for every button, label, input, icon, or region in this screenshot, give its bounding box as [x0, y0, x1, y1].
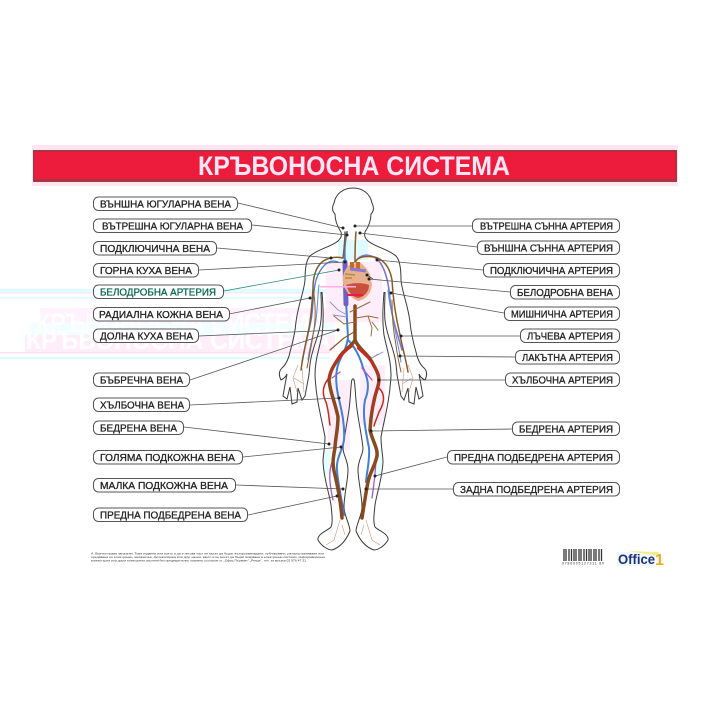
- right label: femoral artery: БЕДРЕНА АРТЕРИЯ: [519, 424, 613, 436]
- pale tint behind vessels: [323, 240, 385, 475]
- left label: subclavian vein: ПОДКЛЮЧИЧНА ВЕНА: [100, 243, 210, 255]
- decorative ghost stripes: [0, 289, 335, 359]
- title: КРЪВОНОСНА СИСТЕМА: [198, 151, 510, 181]
- title banner: [32, 145, 678, 186]
- icon: heart: [320, 262, 372, 301]
- left label: anterior tibial vein: ПРЕДНА ПОДБЕДРЕНА ВЕНА: [100, 510, 241, 522]
- left label: superior vena cava: ГОРНА КУХА ВЕНА: [100, 265, 192, 277]
- logo: Office1: 1: [655, 552, 664, 569]
- left label: iliac vein: ХЪЛБОЧНА ВЕНА: [100, 400, 184, 412]
- right label: ulnar artery: ЛАКЪТНА АРТЕРИЯ: [522, 352, 613, 364]
- left label: external jugular vein: ВЪНШНА ЮГУЛАРНА ВЕНА: [100, 198, 231, 210]
- right label: brachial artery: МИШНИЧНА АРТЕРИЯ: [511, 308, 613, 320]
- decorative ghost stripes: КРЪВОНОСНА СИСТЕМА: [26, 325, 331, 355]
- legal note: предавани по електронен, механичен, фотокопиращ или друг начин, както и не могат да бъдат вкарвани в електронни системи, информационни: [91, 555, 325, 559]
- logo: Office1: Office: [618, 552, 655, 567]
- left label: femoral vein: БЕДРЕНА ВЕНА: [100, 422, 177, 434]
- left label: inferior vena cava: ДОЛНА КУХА ВЕНА: [100, 330, 193, 342]
- left label: internal jugular vein: ВЪТРЕШНА ЮГУЛАРНА ВЕНА: [102, 220, 243, 232]
- barcode: [562, 549, 604, 566]
- left label: radial skin vein: РАДИАЛНА КОЖНА ВЕНА: [99, 309, 223, 321]
- decorative ghost stripes: КРЪВОНОСНА СИСТЕМА: [36, 308, 326, 338]
- barcode: 9780005127311 80: [562, 562, 604, 566]
- left label: small saphenous vein: МАЛКА ПОДКОЖНА ВЕНА: [100, 480, 228, 492]
- legal note: компютърни или други електронни системи без предварително писмено съгласие от „Офис Първият“ „Ренде“, тел. за връзка 02 976 47 31: [91, 558, 306, 562]
- logo: Office1: [617, 551, 664, 569]
- hands and feet detail: [293, 365, 413, 545]
- right label: iliac artery: ХЪЛБОЧНА АРТЕРИЯ: [512, 374, 613, 386]
- leader lines: [184, 203, 520, 515]
- veins: blue and purple: [302, 232, 402, 515]
- left label: pulmonary artery: БЕЛОДРОБНА АРТЕРИЯ: [100, 286, 216, 298]
- right label: pulmonary vein: БЕЛОДРОБНА ВЕНА: [517, 287, 613, 299]
- legal note: [91, 552, 325, 562]
- left label: renal vein: БЪБРЕЧНА ВЕНА: [100, 374, 183, 386]
- left label: great saphenous vein: ГОЛЯМА ПОДКОЖНА ВЕНА: [100, 452, 235, 464]
- legal note: А. Всички права запазени. Това издание или която и да е негова част не могат да бъдат възпроизвеждани, публикувани, разпространявани или: [91, 552, 324, 556]
- right label: radial artery: ЛЪЧЕВА АРТЕРИЯ: [527, 330, 613, 342]
- right label: subclavian artery: ПОДКЛЮЧИЧНА АРТЕРИЯ: [490, 265, 613, 277]
- connector dots: [308, 224, 402, 498]
- arteries: brown and red: [301, 232, 408, 518]
- right label: posterior tibial artery: ЗАДНА ПОДБЕДРЕНА АРТЕРИЯ: [460, 484, 613, 496]
- human body diagram: [279, 188, 427, 550]
- right label: internal carotid artery: ВЪТРЕШНА СЪННА АРТЕРИЯ: [480, 220, 613, 232]
- right label: anterior tibial artery: ПРЕДНА ПОДБЕДРЕНА АРТЕРИЯ: [454, 452, 613, 464]
- body outline: [279, 188, 427, 550]
- right label: external carotid artery: ВЪНШНА СЪННА АРТЕРИЯ: [484, 242, 613, 254]
